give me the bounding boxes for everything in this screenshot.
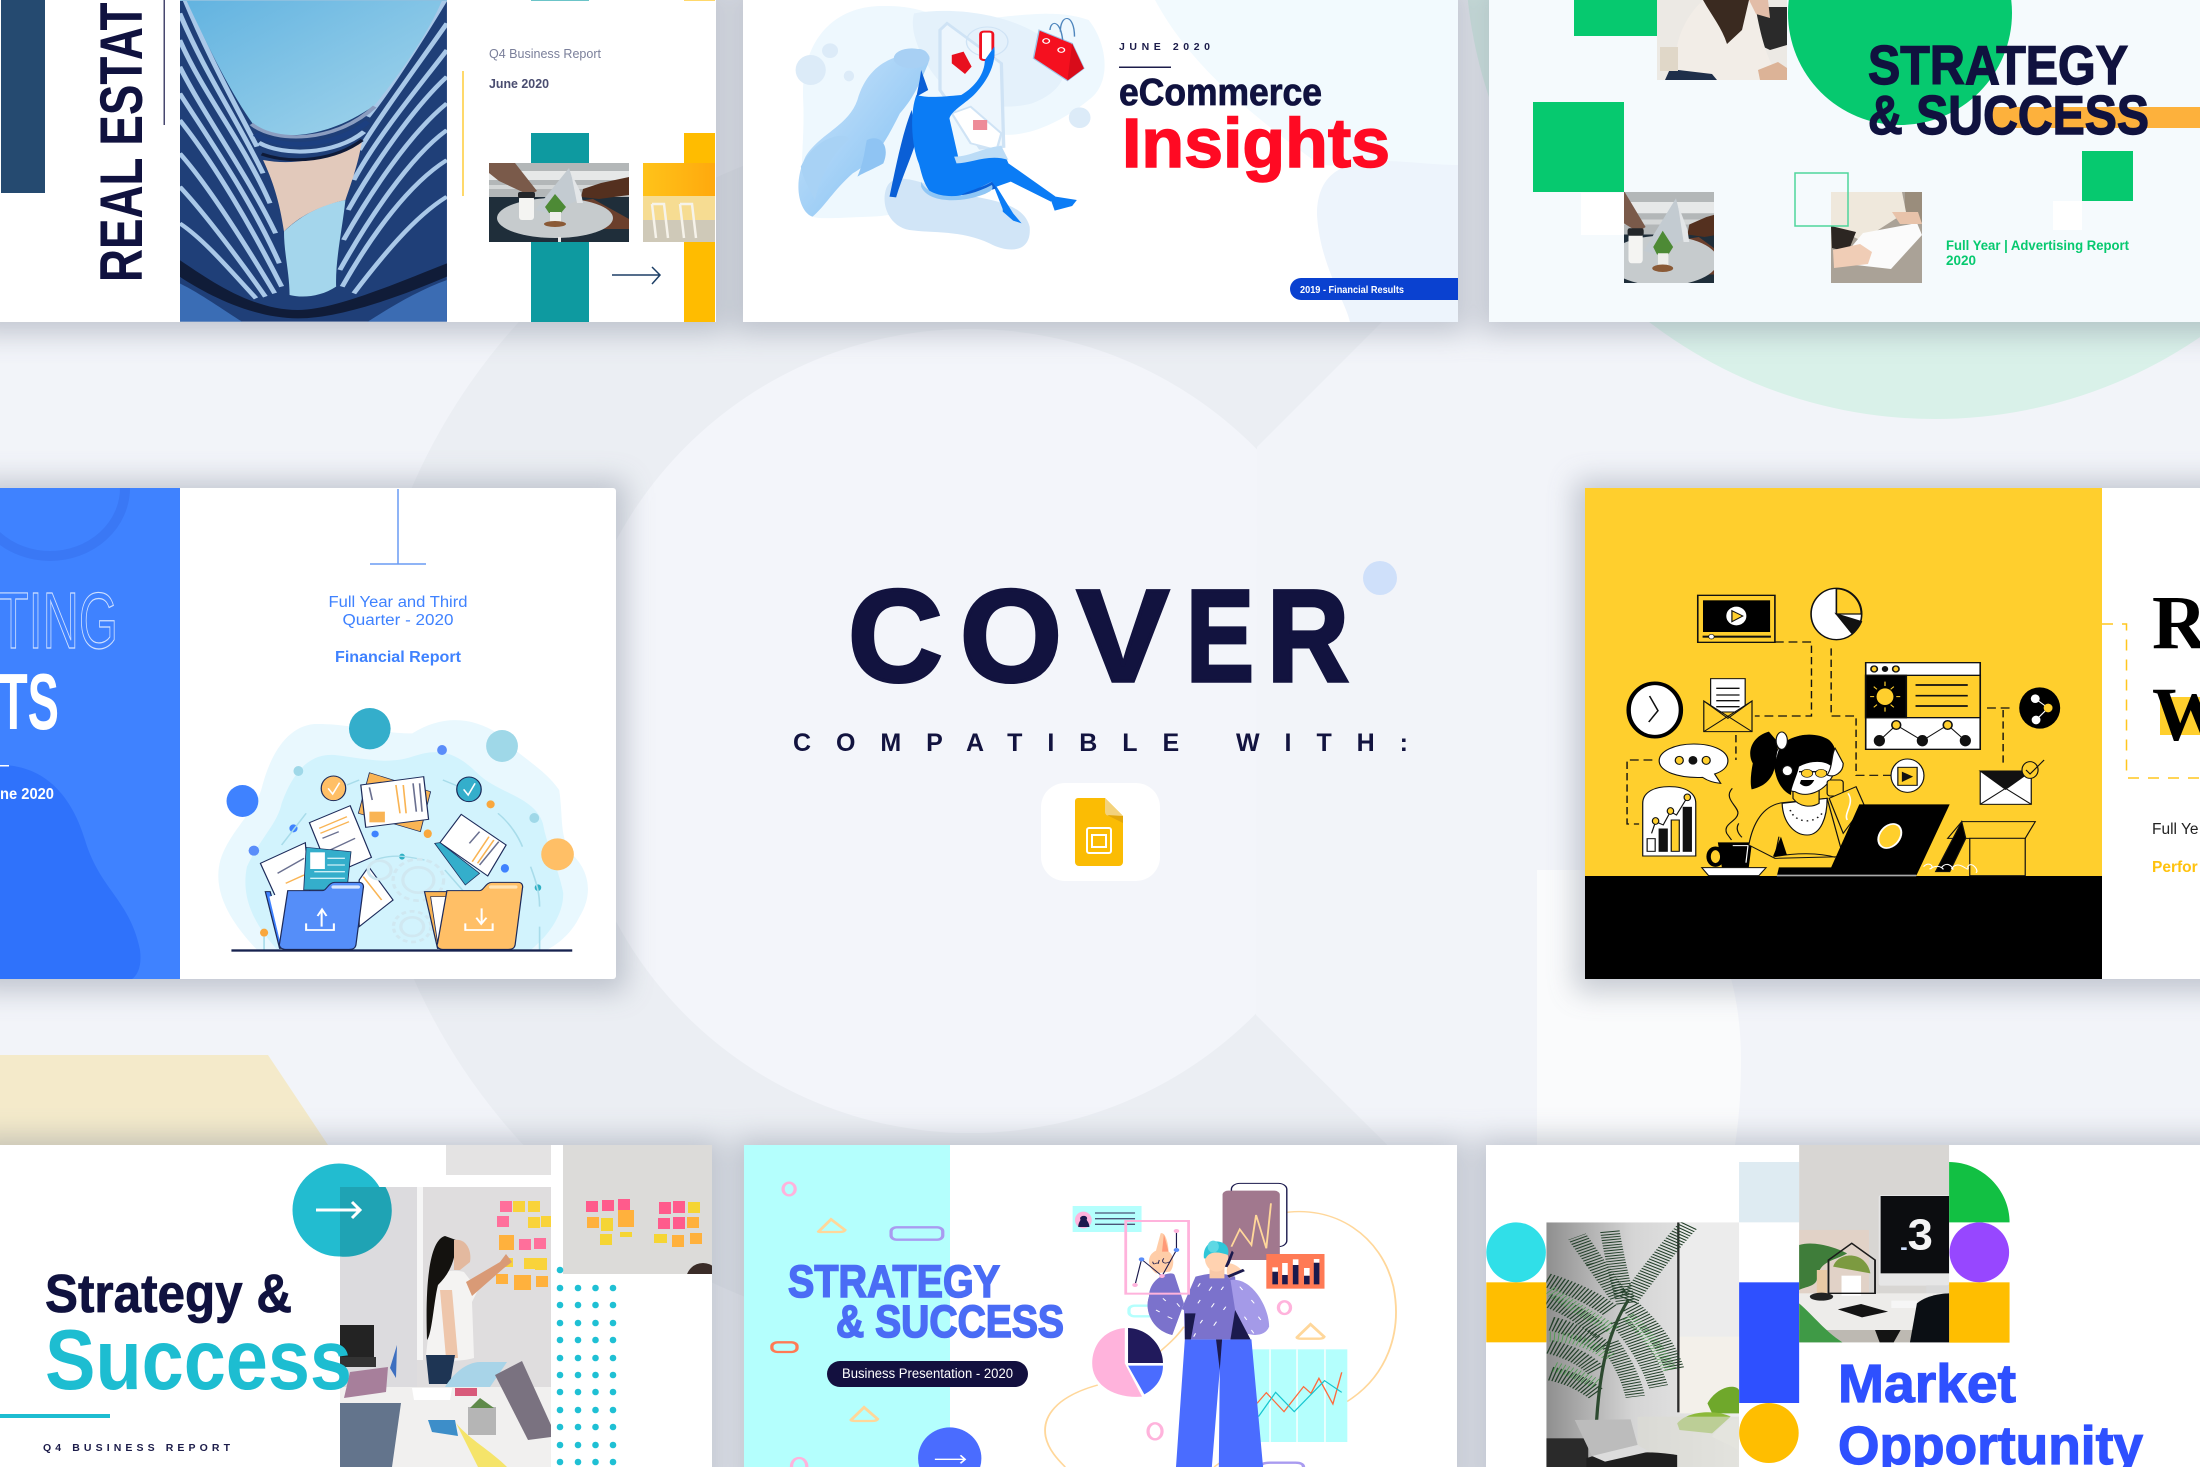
panel: marketing cover: [0, 488, 616, 979]
underline: [0, 1414, 110, 1418]
cyan circle: [1486, 1222, 1546, 1282]
photo: team at sticky notes: [340, 1187, 551, 1467]
panel: yellow illustrated cover: [1585, 488, 2200, 979]
date: June 2020: June 2020: [489, 77, 549, 91]
browser window: [1866, 663, 1980, 749]
heading: Insights: Insights: [1122, 104, 1390, 182]
heading: strategy and success: [1868, 34, 2149, 146]
yellow square right: [1949, 1282, 2010, 1343]
building photo: [180, 0, 447, 322]
light square: [1739, 1162, 1799, 1222]
heading block: cover: E: [1186, 562, 1254, 709]
illustration: woman at laptop with icons: [1627, 588, 2060, 876]
dot grid: [557, 1267, 616, 1465]
yellow circle bottom: [1739, 1403, 1799, 1463]
speech bubble: [1659, 744, 1728, 783]
teal bar: [531, 133, 589, 322]
outline square: [1795, 173, 1848, 226]
subheading: compatible with: COMPATIBLE WITH:: [793, 729, 1408, 757]
text: advertising report: [1946, 238, 2129, 268]
photo: cafe table: [1624, 192, 1714, 283]
arrow: [612, 267, 660, 284]
clock: [1629, 683, 1681, 737]
panel: market opportunity cover: [1486, 1145, 2200, 1467]
woman: [1749, 732, 1864, 858]
photo: signing papers: [1831, 192, 1922, 283]
bar chart card: [1643, 787, 1696, 856]
heading: TING outline: TING: [0, 576, 118, 665]
text: Q4 business report: Q4 BUSINESS REPORT: [43, 1442, 231, 1454]
pill: financial results: 2019 - Financial Results: [1300, 284, 1404, 296]
green quarter circle: [1949, 1162, 2010, 1222]
background circle: mint: [1465, 0, 2200, 419]
text: June 2020: JUNE 2020: [1119, 41, 1210, 53]
text: advertising report: Full Year | Advertising Report: [1946, 238, 2129, 253]
tablet: [1223, 1183, 1287, 1260]
heading: strategy and success: [788, 1256, 1064, 1347]
blue rectangle: [1739, 1282, 1799, 1403]
envelope with letter: [1704, 679, 1752, 732]
text: advertising report: 2020: [1946, 253, 1976, 268]
decorative shapes and illustration: [772, 1183, 1396, 1467]
mail with check: [1980, 760, 2044, 804]
decorative dot: [1363, 561, 1397, 595]
date: June 2020: ne 2020: [0, 786, 54, 803]
icon: google slides: [1041, 783, 1160, 881]
big green circle: [1788, 0, 2012, 125]
heading: strategy and success: & SUCCESS: [836, 1296, 1064, 1347]
pill: financial results: [1290, 278, 1458, 300]
green square: top: [1574, 0, 1657, 36]
text: full year: Full Ye: [2152, 821, 2199, 838]
panel: real estate cover: [0, 0, 716, 322]
dashed frame: [2102, 624, 2200, 778]
heading: strategy and success: STRATEGY: [1868, 34, 2128, 96]
man with phone: [1148, 1241, 1269, 1467]
panel: strategy and success photo cover: [0, 1145, 720, 1467]
heading: market opportunity: Market: [1838, 1354, 2016, 1414]
T connector: [370, 489, 426, 564]
photo: woman at desk: [1657, 0, 1787, 80]
orange bar: [1990, 107, 2200, 128]
heading: market opportunity: [1838, 1354, 2143, 1467]
yellow area: [1585, 488, 2102, 876]
heading block: cover: [848, 562, 1349, 709]
blue side panel: [0, 488, 180, 979]
pill: business presentation: Business Presentation - 2020: [842, 1366, 1013, 1381]
background shape: beige: [0, 1055, 328, 1145]
photo: cafe table: [489, 163, 629, 242]
purple circle: [1950, 1222, 2009, 1282]
illustration: folders and documents: [218, 708, 588, 952]
highlight bar: [2160, 697, 2200, 735]
heading: strategy: Strategy &: [45, 1264, 292, 1324]
pie chart: [1092, 1328, 1163, 1397]
heading: TS: TS: [0, 657, 59, 746]
heading: strategy and success: STRATEGY: [788, 1256, 1000, 1307]
navy side bar: [1, 0, 45, 193]
text block: financial report: Financial Report: [335, 649, 461, 666]
red bar chart card: [1266, 1254, 1325, 1289]
subtitle: Q4 business report: Q4 Business Report: [489, 46, 601, 61]
heading: strategy and success: & SUCCESS: [1868, 84, 2149, 146]
heading block: cover: C: [848, 562, 943, 709]
photo: orange office: [643, 163, 715, 242]
laptop: [1777, 804, 1950, 876]
green square: left: [1533, 102, 1624, 192]
text: performance: Perfor: [2152, 859, 2198, 876]
pink frame and hand: [1126, 1221, 1189, 1294]
pie chart: [1811, 588, 1862, 640]
heading: success: Success: [45, 1313, 352, 1408]
photo: sticky notes wall: [563, 1145, 712, 1274]
green square: right: [2082, 151, 2133, 201]
text block: financial report: Full Year and Third: [328, 594, 468, 611]
profile card: [1073, 1206, 1142, 1232]
text block: financial report: Quarter - 2020: [342, 612, 454, 629]
coffee cup: [1702, 788, 1766, 876]
blue circle with arrow: [918, 1427, 981, 1467]
orange bar: [684, 133, 715, 322]
background shapes: [361, 122, 1741, 1340]
black desk: [1585, 876, 2102, 979]
video player: [1698, 595, 1775, 642]
play icon: [1891, 759, 1924, 792]
yellow square left: [1486, 1282, 1546, 1342]
teal circle with arrow: [292, 1164, 392, 1257]
heading block: cover: V: [1077, 562, 1169, 709]
cyan side panel: [744, 1145, 950, 1467]
heading block: cover: O: [960, 562, 1062, 709]
heading: eCommerce: eCommerce: [1119, 72, 1322, 114]
photo: desk with monitor: [1799, 1145, 1949, 1342]
panel: business presentation cover: [744, 1145, 1457, 1467]
text block: financial report: [328, 594, 468, 666]
box on desk: [1924, 822, 2035, 876]
panel: ecommerce insights cover: [743, 0, 1458, 322]
photo: palm and laptop: [1546, 1222, 1739, 1467]
cyan line chart: [1251, 1349, 1347, 1442]
heading block: cover: R: [1267, 562, 1349, 709]
monitor time: 3: [1908, 1211, 1933, 1259]
illustration: woman reaching for shopping bag: [796, 6, 1105, 249]
photo: small wall strip: [446, 1145, 551, 1175]
share icon: [2019, 687, 2060, 729]
panel: strategy and success green cover: [1489, 0, 2200, 322]
pill: business presentation: [827, 1361, 1028, 1387]
